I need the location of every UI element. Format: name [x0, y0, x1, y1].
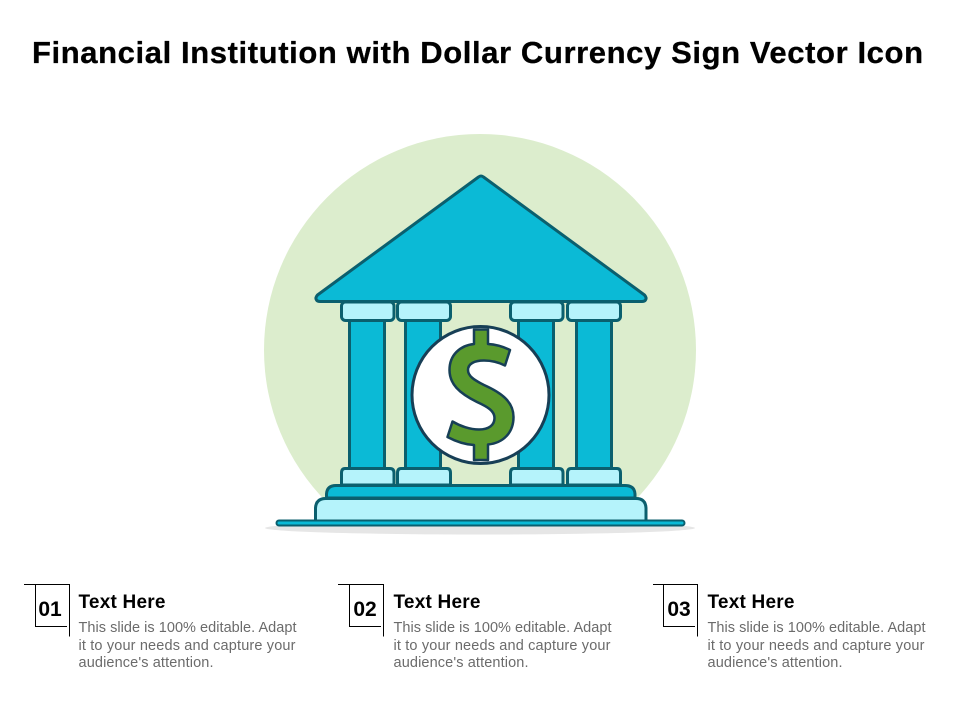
- body 01: it to your needs and capture your: [78, 638, 296, 654]
- lower plinth: [316, 498, 646, 521]
- upper plinth: [326, 486, 635, 498]
- column capitals: [342, 302, 620, 320]
- number 01: 01: [38, 598, 62, 621]
- body 02: audience's attention.: [394, 655, 528, 671]
- floor bar: [276, 520, 684, 526]
- number frame 01: [24, 584, 70, 636]
- number frame 02: [338, 584, 384, 636]
- heading 03: Text Here: [708, 592, 794, 613]
- body 01: This slide is 100% editable. Adapt: [78, 620, 296, 636]
- columns: [350, 320, 612, 469]
- body 01: audience's attention.: [78, 655, 214, 671]
- item 02: [338, 584, 612, 671]
- body 03: This slide is 100% editable. Adapt: [708, 620, 926, 636]
- heading 02: Text Here: [394, 592, 480, 613]
- dollar sign: [448, 330, 514, 460]
- number 02: 02: [353, 598, 377, 621]
- body 03: it to your needs and capture your: [708, 638, 925, 654]
- icon: bank building with dollar sign: [250, 134, 710, 580]
- item 01: [24, 584, 296, 671]
- ground shadow: [265, 522, 695, 534]
- number frame 03: [653, 584, 698, 636]
- roof: [316, 176, 646, 302]
- number 03: 03: [667, 598, 691, 621]
- coin: [412, 326, 549, 464]
- white cutout below the building: [250, 498, 710, 580]
- heading 01: Text Here: [78, 592, 166, 613]
- title: Financial Institution with Dollar Currency Sign Vector Icon: [32, 35, 923, 70]
- item 03: [653, 584, 926, 671]
- column bases: [342, 468, 620, 485]
- body 02: it to your needs and capture your: [394, 638, 611, 654]
- body 02: This slide is 100% editable. Adapt: [394, 620, 612, 636]
- body 03: audience's attention.: [708, 655, 842, 671]
- background circle: [264, 134, 696, 566]
